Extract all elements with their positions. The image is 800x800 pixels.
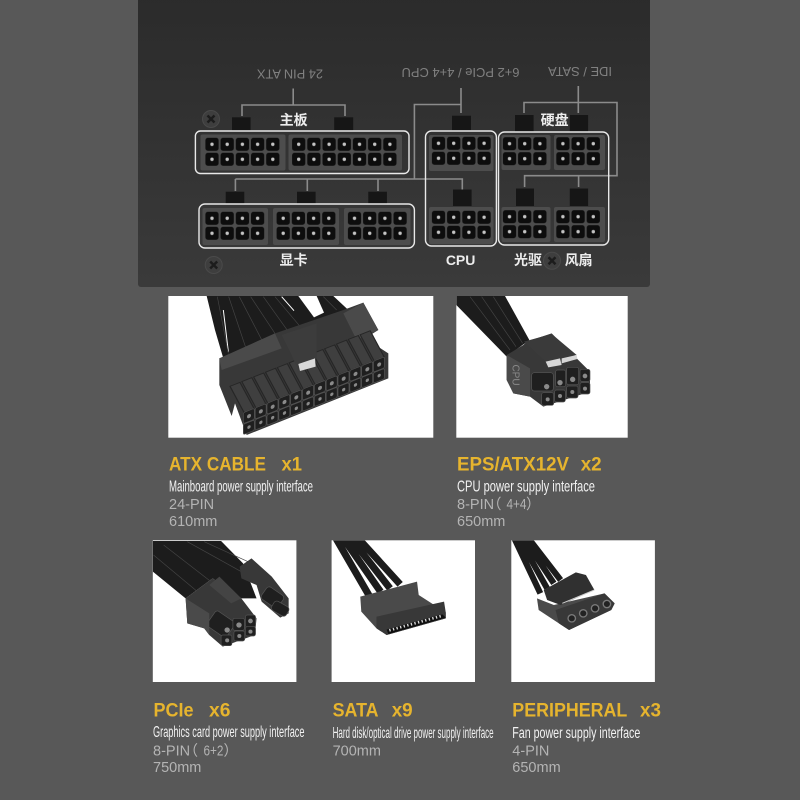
panel: power supply modular connector plate [138, 0, 650, 287]
label: motherboard: 主板 [280, 112, 308, 128]
label: CPU: CPU [446, 252, 475, 268]
upside-down label: 6+2 PCIe / 4+4 CPU: 6+2 PCIe / 4+4 CPU [402, 65, 520, 80]
heading: PCIe x6: PCIe [154, 701, 194, 722]
upside-down label: 24 PIN ATX: 24 PIN ATX [257, 66, 323, 82]
text block: EPS details: 650mm [457, 514, 505, 530]
text block: ATX details [169, 478, 313, 530]
panel: SATA cable photo [332, 538, 475, 682]
panel: ATX cable photo [168, 296, 433, 440]
connector group: drives and fans [498, 112, 609, 268]
heading: EPS/ATX12V x2: EPS/ATX12V [457, 454, 569, 476]
label: graphics card: 显卡 [280, 252, 308, 268]
label: fan: 风扇 [565, 252, 593, 268]
text block: EPS details [457, 478, 595, 530]
text block: EPS details: CPU power supply interface [457, 478, 595, 496]
text block: PCIe details: （ [184, 743, 198, 760]
text block: EPS details: （ [487, 496, 502, 513]
heading: PERIPHERAL x3: PERIPHERAL [512, 701, 628, 722]
heading: ATX CABLE x1: x1 [282, 454, 302, 476]
screw bottom left [205, 256, 222, 274]
text block: peripheral details: 4-PIN [512, 744, 549, 760]
text block: PCIe details [153, 724, 305, 776]
text block: ATX details: Mainboard power supply interface [169, 478, 313, 496]
heading: ATX CABLE x1: ATX CABLE [169, 454, 266, 476]
upside-down label: IDE / SATA: IDE / SATA [548, 64, 612, 79]
heading: PCIe x6 [154, 701, 230, 722]
text block: SATA details: 700mm [333, 744, 381, 760]
wiring lines [235, 86, 617, 191]
connector group: motherboard [195, 112, 409, 174]
connector group: graphics card [199, 192, 414, 268]
text block: peripheral details: 650mm [512, 760, 561, 776]
text block: PCIe details: ） [224, 743, 238, 760]
heading: PCIe x6: x6 [209, 701, 230, 722]
connector group: CPU [426, 116, 496, 268]
screw bottom centre [544, 252, 560, 269]
heading: SATA x9: SATA [333, 701, 379, 722]
text block: PCIe details: 8-PIN [153, 744, 190, 760]
text block: EPS details: 4+4 [506, 497, 526, 513]
panel: PCIe cable photo [153, 540, 296, 682]
text block: peripheral details [512, 725, 640, 776]
label: optical drive: 光驱 [514, 252, 542, 268]
panel: EPS cable photo [456, 296, 628, 438]
heading: SATA x9 [333, 701, 413, 722]
infographic canvas [138, 0, 660, 772]
panel: peripheral cable photo [511, 538, 655, 682]
text block: PCIe details: 6+2 [204, 744, 224, 760]
heading: EPS/ATX12V x2: x2 [581, 454, 602, 476]
text block: EPS details: 8-PIN [457, 497, 494, 513]
text block: EPS details: ） [526, 496, 540, 513]
text block: SATA details: Hard disk/optical drive power supply interface [333, 725, 494, 742]
label: hard disk: 硬盘 [541, 112, 569, 128]
text block: PCIe details: 750mm [153, 760, 201, 776]
screw top left [202, 110, 220, 128]
text block: ATX details: 24-PIN [169, 497, 214, 513]
text block: PCIe details: Graphics card power supply interface [153, 724, 305, 741]
text block: ATX details: 610mm [169, 514, 217, 530]
text block: SATA details [333, 725, 494, 760]
heading: PERIPHERAL x3: x3 [640, 701, 661, 722]
moulded CPU mark: CPU [510, 364, 521, 386]
text block: peripheral details: Fan power supply interface [512, 725, 640, 742]
heading: SATA x9: x9 [392, 701, 413, 722]
